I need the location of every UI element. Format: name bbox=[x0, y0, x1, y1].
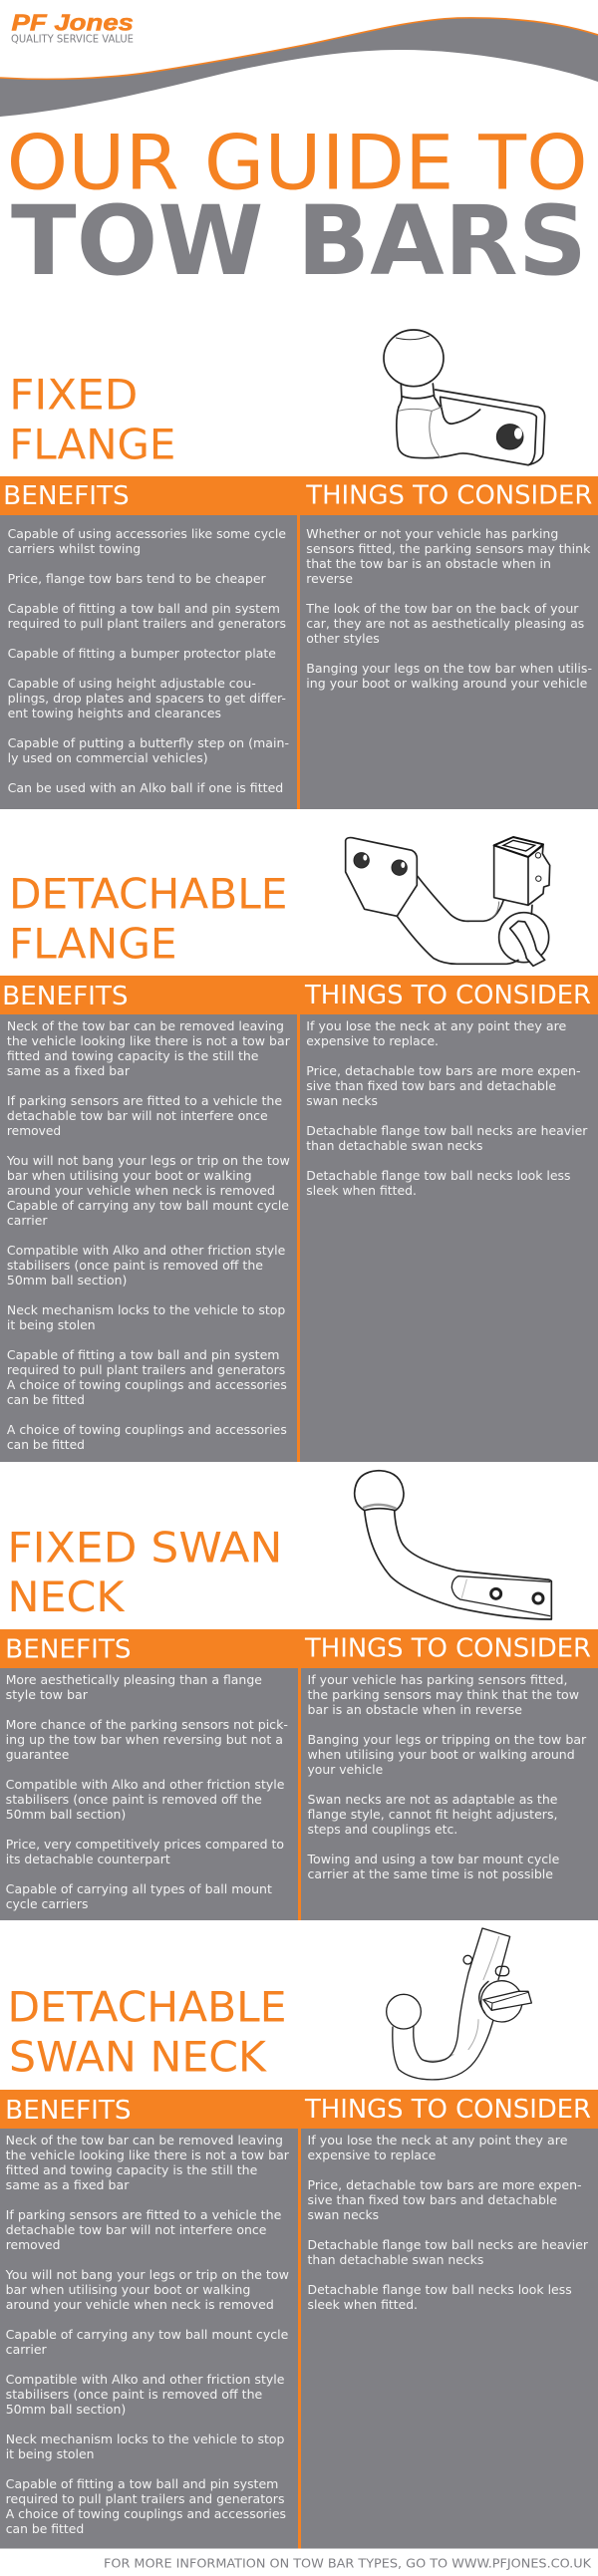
things to consider: fixed flange: ing your boot or walking around your vehicle bbox=[306, 676, 588, 691]
benefits: fixed flange: Capable of fitting a tow ball and pin system bbox=[8, 601, 280, 616]
heading: detachable swan neck: SWAN NECK bbox=[9, 2032, 267, 2081]
things to consider: detachable flange: If you lose the neck at any point they are bbox=[306, 1018, 567, 1033]
heading: detachable swan neck: DETACHABLE bbox=[8, 1983, 287, 2032]
benefits: detachable flange: If parking sensors are fitted to a vehicle the bbox=[7, 1093, 283, 1108]
benefits: detachable swan neck: Compatible with Alko and other friction style bbox=[6, 2372, 285, 2387]
benefits: detachable swan neck: If parking sensors are fitted to a vehicle the bbox=[6, 2207, 282, 2222]
header bar: detachable swan neck bbox=[0, 2090, 598, 2129]
benefits: detachable flange: the vehicle looking like there is not a tow bar bbox=[7, 1033, 291, 1048]
things to consider: fixed swan neck: Banging your legs or tripping on the tow bar bbox=[307, 1732, 587, 1747]
heading: fixed swan neck bbox=[7, 1523, 282, 1621]
things to consider: fixed swan neck: Swan necks are not as adaptable as the bbox=[307, 1792, 558, 1807]
benefits: detachable swan neck: Capable of carrying any tow ball mount cycle bbox=[6, 2327, 289, 2342]
things to consider: detachable swan neck: If you lose the neck at any point they are bbox=[307, 2133, 568, 2147]
benefits: fixed swan neck: Compatible with Alko and other friction style bbox=[6, 1777, 285, 1792]
benefits: fixed swan neck: Price, very competitively prices compared to bbox=[6, 1837, 284, 1852]
benefits: fixed swan neck: Capable of carrying all types of ball mount bbox=[6, 1881, 272, 1896]
benefits: detachable flange: A choice of towing couplings and accessories bbox=[7, 1422, 287, 1437]
things to consider: fixed flange: other styles bbox=[306, 631, 380, 646]
benefits: detachable swan neck: Neck of the tow bar can be removed leaving bbox=[6, 2133, 283, 2147]
header bar: fixed swan neck: BENEFITS bbox=[5, 1634, 132, 1664]
benefits: fixed swan neck: guarantee bbox=[6, 1747, 70, 1762]
benefits: detachable swan neck: carrier bbox=[6, 2342, 48, 2357]
benefits: detachable swan neck: it being stolen bbox=[6, 2446, 95, 2461]
things to consider: detachable flange: Detachable flange tow ball necks look less bbox=[306, 1168, 570, 1183]
things to consider: detachable flange: sleek when fitted. bbox=[306, 1183, 417, 1198]
header bar: fixed flange: BENEFITS bbox=[3, 481, 130, 511]
things to consider: fixed swan neck: the parking sensors may think that the tow bbox=[307, 1687, 579, 1702]
things to consider: fixed swan neck: Towing and using a tow bar mount cycle bbox=[306, 1852, 560, 1866]
heading: detachable flange bbox=[9, 870, 287, 969]
things to consider: fixed flange: reverse bbox=[306, 571, 353, 586]
benefits: detachable flange: can be fitted bbox=[7, 1437, 85, 1452]
benefits: fixed swan neck: More chance of the parking sensors not pick- bbox=[6, 1717, 288, 1732]
title: TOW BARS bbox=[11, 185, 587, 297]
benefits: fixed swan neck: More aesthetically pleasing than a flange bbox=[6, 1672, 262, 1687]
things to consider: fixed flange: The look of the tow bar on the back of your bbox=[305, 601, 579, 616]
benefits: fixed swan neck: its detachable counterpart bbox=[6, 1852, 170, 1866]
benefits: detachable flange: detachable tow bar will not interfere once bbox=[7, 1108, 268, 1123]
benefits: fixed flange: ent towing heights and clearances bbox=[8, 706, 221, 720]
benefits: fixed flange: required to pull plant trailers and generators bbox=[8, 616, 286, 631]
things to consider: detachable swan neck: Price, detachable tow bars are more expen- bbox=[307, 2177, 582, 2192]
benefits: detachable swan neck: A choice of towing couplings and accessories bbox=[6, 2506, 286, 2521]
benefits: detachable swan neck: the vehicle looking like there is not a tow bar bbox=[6, 2147, 290, 2162]
icon: detachable flange tow bar bbox=[346, 837, 550, 966]
benefits: detachable swan neck bbox=[5, 2133, 290, 2536]
things to consider: fixed swan neck: bar is an obstacle when in reverse bbox=[307, 1702, 522, 1717]
benefits: detachable swan neck: fitted and towing capacity is the still the bbox=[6, 2162, 258, 2177]
benefits: detachable flange: required to pull plant trailers and generators bbox=[7, 1362, 285, 1377]
things to consider: fixed swan neck: your vehicle bbox=[307, 1762, 383, 1777]
benefits: detachable swan neck: stabilisers (once paint is removed off the bbox=[6, 2387, 263, 2402]
things to consider: detachable flange: swan necks bbox=[306, 1093, 378, 1108]
things to consider: fixed swan neck: If your vehicle has parking sensors fitted, bbox=[307, 1672, 568, 1687]
things to consider: detachable swan neck bbox=[307, 2133, 589, 2312]
header wave bbox=[0, 18, 598, 117]
header bar: fixed swan neck: THINGS TO CONSIDER bbox=[304, 1633, 591, 1663]
things to consider: fixed swan neck: when utilising your boot or walking around bbox=[307, 1747, 575, 1762]
panel: fixed swan neck bbox=[0, 1668, 598, 1920]
heading: detachable flange: FLANGE bbox=[9, 920, 177, 969]
benefits: detachable flange bbox=[6, 1018, 291, 1452]
things to consider: fixed swan neck bbox=[306, 1672, 587, 1881]
benefits: fixed swan neck: 50mm ball section) bbox=[6, 1807, 126, 1822]
header bar: detachable flange: BENEFITS bbox=[2, 982, 129, 1011]
things to consider: detachable flange: than detachable swan necks bbox=[306, 1138, 482, 1153]
benefits: detachable swan neck: around your vehicle when neck is removed bbox=[6, 2297, 274, 2312]
header bar: detachable swan neck: BENEFITS bbox=[5, 2096, 132, 2126]
heading: fixed flange bbox=[9, 371, 175, 468]
benefits: detachable swan neck: detachable tow bar will not interfere once bbox=[6, 2222, 267, 2237]
benefits: detachable flange: removed bbox=[7, 1123, 61, 1138]
benefits: fixed swan neck: ing up the tow bar when reversing but not a bbox=[6, 1732, 283, 1747]
things to consider: fixed flange: car, they are not as aesthetically pleasing as bbox=[306, 616, 584, 631]
things to consider: detachable swan neck: expensive to replace bbox=[307, 2147, 437, 2162]
header bar: fixed flange bbox=[0, 476, 598, 515]
icon: detachable swan neck tow bar bbox=[387, 1928, 531, 2080]
benefits: detachable flange: You will not bang your legs or trip on the tow bbox=[6, 1153, 290, 1168]
benefits: fixed flange: Price, flange tow bars tend to be cheaper bbox=[8, 571, 267, 586]
benefits: fixed swan neck: stabilisers (once paint is removed off the bbox=[6, 1792, 262, 1807]
logo: PF Jones: PF Jones bbox=[12, 10, 134, 36]
heading: fixed swan neck: NECK bbox=[8, 1573, 126, 1621]
benefits: detachable swan neck: You will not bang your legs or trip on the tow bbox=[5, 2267, 289, 2282]
benefits: fixed flange: Capable of using accessories like some cycle bbox=[8, 526, 286, 541]
things to consider: fixed swan neck: carrier at the same time is not possible bbox=[307, 1866, 553, 1881]
benefits: fixed flange: carriers whilst towing bbox=[8, 541, 141, 556]
benefits: fixed flange: Can be used with an Alko ball if one is fitted bbox=[8, 780, 283, 795]
benefits: detachable flange: Capable of fitting a tow ball and pin system bbox=[7, 1347, 280, 1362]
things to consider: detachable flange: expensive to replace. bbox=[306, 1033, 439, 1048]
things to consider: detachable swan neck: sive than fixed tow bars and detachable bbox=[307, 2192, 557, 2207]
benefits: detachable flange: Compatible with Alko and other friction style bbox=[7, 1243, 286, 1258]
things to consider: fixed flange: Banging your legs on the tow bar when utilis- bbox=[306, 661, 592, 676]
panel: detachable flange bbox=[0, 1014, 598, 1462]
things to consider: detachable swan neck: swan necks bbox=[307, 2207, 379, 2222]
benefits: detachable flange: around your vehicle when neck is removed bbox=[7, 1183, 275, 1198]
benefits: detachable flange: it being stolen bbox=[7, 1317, 96, 1332]
benefits: detachable flange: Neck of the tow bar can be removed leaving bbox=[7, 1018, 284, 1033]
benefits: detachable flange: same as a fixed bar bbox=[7, 1063, 131, 1078]
heading: fixed flange: FIXED bbox=[9, 371, 138, 420]
benefits: fixed flange: ly used on commercial vehicles) bbox=[8, 750, 208, 765]
benefits: fixed flange bbox=[8, 526, 289, 795]
benefits: detachable flange: fitted and towing capacity is the still the bbox=[7, 1048, 259, 1063]
benefits: fixed swan neck: style tow bar bbox=[6, 1687, 89, 1702]
panel: detachable swan neck bbox=[0, 2129, 598, 2549]
things to consider: detachable swan neck: sleek when fitted. bbox=[307, 2297, 418, 2312]
header bar: detachable swan neck: THINGS TO CONSIDER bbox=[304, 2095, 591, 2125]
benefits: detachable flange: bar when utilising your boot or walking bbox=[7, 1168, 252, 1183]
heading: fixed flange: FLANGE bbox=[9, 421, 175, 468]
benefits: detachable flange: 50mm ball section) bbox=[7, 1273, 127, 1288]
things to consider: fixed flange: Whether or not your vehicle has parking bbox=[306, 526, 558, 541]
header bar: detachable flange bbox=[0, 976, 598, 1014]
title bbox=[7, 120, 588, 297]
panel: fixed flange bbox=[0, 515, 598, 809]
benefits: detachable swan neck: can be fitted bbox=[6, 2521, 84, 2536]
things to consider: detachable swan neck: than detachable swan necks bbox=[307, 2252, 483, 2267]
header bar: fixed swan neck bbox=[0, 1629, 598, 1668]
benefits: detachable swan neck: bar when utilising your boot or walking bbox=[6, 2282, 250, 2297]
things to consider: detachable flange: Price, detachable tow bars are more expen- bbox=[306, 1063, 580, 1078]
things to consider: fixed flange: sensors fitted, the parking sensors may think bbox=[306, 541, 591, 556]
title: OUR GUIDE TO bbox=[7, 120, 588, 207]
benefits: fixed swan neck bbox=[6, 1672, 288, 1911]
benefits: fixed flange: plings, drop plates and spacers to get differ- bbox=[8, 691, 286, 706]
benefits: fixed flange: Capable of using height adjustable cou- bbox=[8, 676, 256, 691]
things to consider: fixed swan neck: flange style, cannot fit height adjusters, bbox=[307, 1807, 558, 1822]
benefits: detachable swan neck: 50mm ball section) bbox=[6, 2402, 126, 2417]
things to consider: detachable flange: Detachable flange tow ball necks are heavier bbox=[306, 1123, 588, 1138]
benefits: detachable swan neck: same as a fixed bar bbox=[6, 2177, 130, 2192]
benefits: detachable swan neck: removed bbox=[6, 2237, 60, 2252]
benefits: detachable flange: A choice of towing couplings and accessories bbox=[7, 1377, 287, 1392]
things to consider: fixed flange: that the tow bar is an obstacle when in bbox=[306, 556, 551, 571]
benefits: detachable flange: Neck mechanism locks to the vehicle to stop bbox=[7, 1302, 285, 1317]
things to consider: detachable flange: sive than fixed tow bars and detachable bbox=[306, 1078, 556, 1093]
things to consider: detachable flange bbox=[306, 1018, 588, 1198]
benefits: detachable flange: can be fitted bbox=[7, 1392, 85, 1407]
header bar: fixed flange: THINGS TO CONSIDER bbox=[305, 480, 592, 510]
benefits: detachable swan neck: required to pull plant trailers and generators bbox=[6, 2491, 284, 2506]
header bar: detachable flange: THINGS TO CONSIDER bbox=[304, 981, 591, 1010]
things to consider: fixed flange bbox=[305, 526, 592, 691]
benefits: fixed flange: Capable of fitting a bumper protector plate bbox=[8, 646, 276, 661]
benefits: fixed swan neck: cycle carriers bbox=[6, 1896, 88, 1911]
benefits: detachable swan neck: Neck mechanism locks to the vehicle to stop bbox=[6, 2432, 285, 2446]
benefits: detachable flange: Capable of carrying any tow ball mount cycle bbox=[7, 1198, 289, 1213]
benefits: fixed flange: Capable of putting a butterfly step on (main- bbox=[8, 735, 289, 750]
icon: fixed swan neck tow bar bbox=[355, 1471, 551, 1619]
icon: fixed flange tow bar bbox=[384, 330, 545, 465]
benefits: detachable swan neck: Capable of fitting a tow ball and pin system bbox=[6, 2476, 278, 2491]
logo: PF Jones bbox=[11, 10, 134, 46]
heading: fixed swan neck: FIXED SWAN bbox=[7, 1523, 282, 1572]
things to consider: fixed swan neck: steps and couplings etc. bbox=[307, 1822, 457, 1837]
heading: detachable swan neck bbox=[8, 1983, 287, 2081]
footer text: FOR MORE INFORMATION ON TOW BAR TYPES, GO TO WWW.PFJONES.CO.UK bbox=[104, 2556, 592, 2571]
benefits: detachable flange: carrier bbox=[7, 1213, 48, 1228]
logo: PF Jones: QUALITY SERVICE VALUE bbox=[11, 35, 134, 46]
benefits: detachable flange: stabilisers (once paint is removed off the bbox=[7, 1258, 263, 1273]
things to consider: detachable swan neck: Detachable flange tow ball necks are heavier bbox=[307, 2237, 589, 2252]
heading: detachable flange: DETACHABLE bbox=[9, 870, 287, 919]
things to consider: detachable swan neck: Detachable flange tow ball necks look less bbox=[307, 2282, 572, 2297]
